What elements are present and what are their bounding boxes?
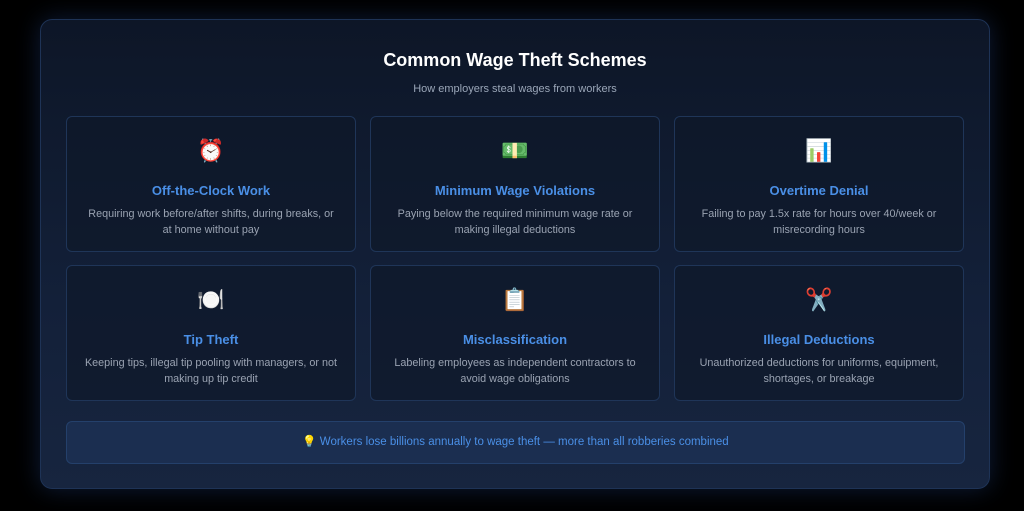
callout <box>66 421 965 464</box>
card: overtime <box>674 116 964 252</box>
card: tip theft: making up tip credit <box>164 373 258 385</box>
card: minimum wage: Minimum Wage Violations <box>435 183 595 198</box>
card: off-the-clock: ⏰ <box>197 138 225 163</box>
card: off-the-clock: Requiring work before/after shifts, during breaks, or <box>88 208 334 220</box>
card: illegal deductions: ✂️ <box>805 287 833 312</box>
card: off-the-clock: Off-the-Clock Work <box>152 183 270 198</box>
card: illegal deductions <box>674 265 964 401</box>
card: minimum wage: making illegal deductions <box>455 224 575 236</box>
card: overtime: misrecording hours <box>773 224 865 236</box>
title: Common Wage Theft Schemes <box>383 50 647 70</box>
card: overtime: Overtime Denial <box>770 183 868 198</box>
subtitle: How employers steal wages from workers <box>413 83 617 95</box>
card: off-the-clock: at home without pay <box>163 224 259 236</box>
card: misclassification: Misclassification <box>463 332 567 347</box>
card: illegal deductions: shortages, or breakage <box>763 373 875 385</box>
card: overtime: 📊 <box>805 138 833 163</box>
card: tip theft: 🍽️ <box>197 287 225 312</box>
card: illegal deductions: Illegal Deductions <box>763 332 875 347</box>
card: off-the-clock <box>66 116 356 252</box>
card: minimum wage <box>370 116 660 252</box>
card: minimum wage: 💵 <box>501 138 529 163</box>
card: misclassification: Labeling employees as independent contractors to <box>394 357 636 369</box>
card: overtime: Failing to pay 1.5x rate for hours over 40/week or <box>702 208 936 220</box>
callout: 💡 Workers lose billions annually to wage theft — more than all robberies combined <box>302 436 729 448</box>
card: tip theft: Keeping tips, illegal tip pooling with managers, or not <box>85 357 337 369</box>
card: tip theft <box>66 265 356 401</box>
card: misclassification: avoid wage obligations <box>460 373 570 385</box>
card: tip theft: Tip Theft <box>184 332 238 347</box>
card: misclassification: 📋 <box>501 287 529 312</box>
card: illegal deductions: Unauthorized deductions for uniforms, equipment, <box>700 357 938 369</box>
card: minimum wage: Paying below the required minimum wage rate or <box>398 208 632 220</box>
card: misclassification <box>370 265 660 401</box>
